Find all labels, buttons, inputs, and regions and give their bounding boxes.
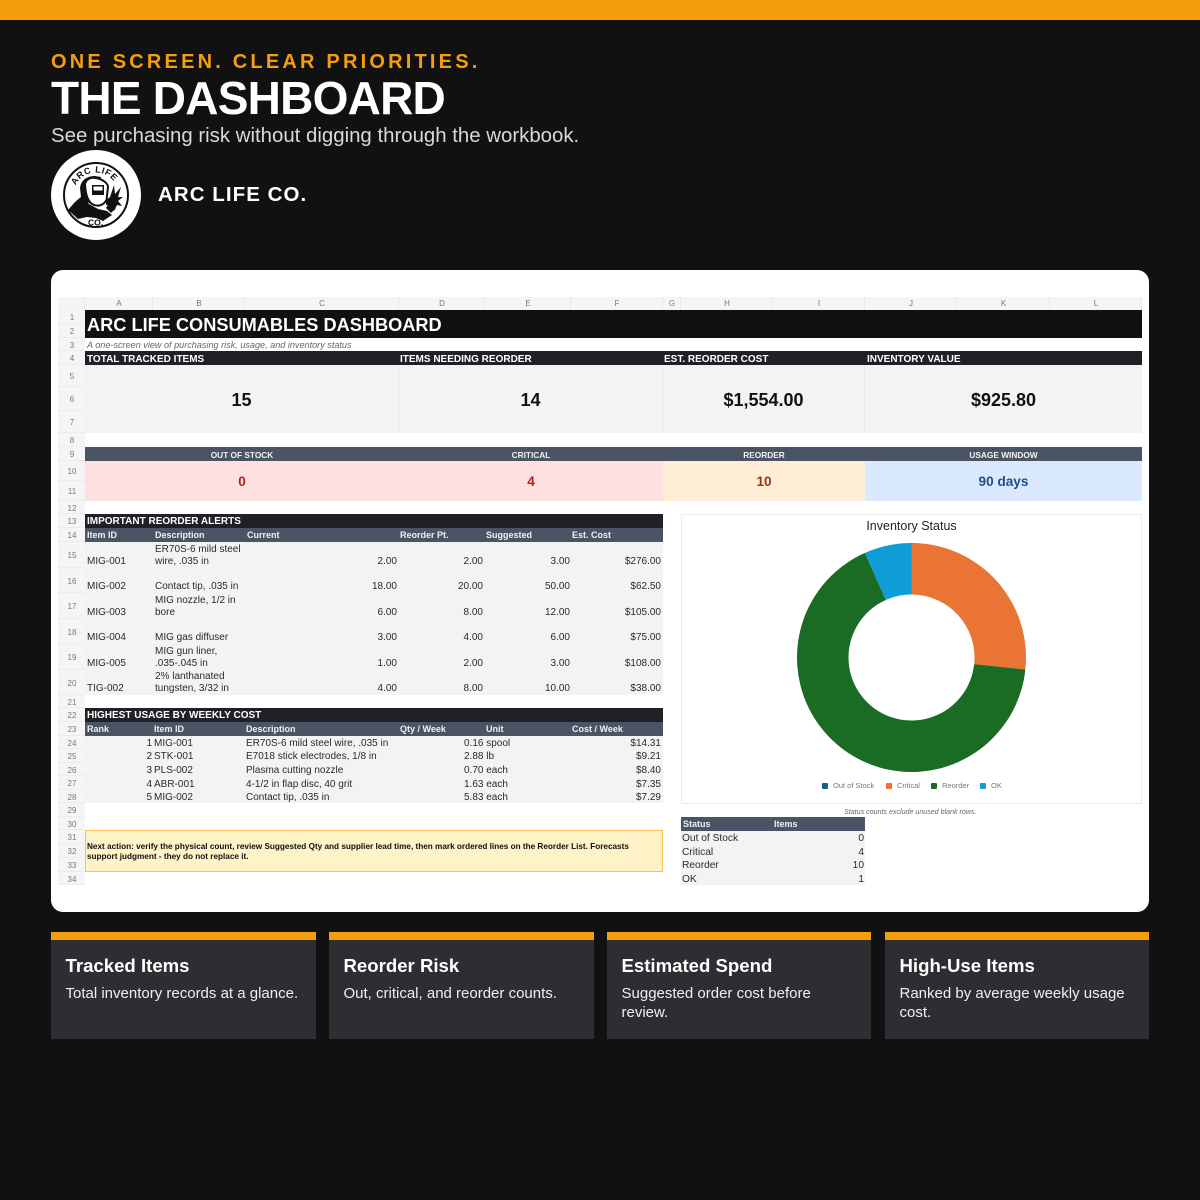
panel: dashboard spreadsheet (51, 270, 1149, 912)
status counts table: 0 (858, 833, 864, 844)
highest usage table: 2.88 lb (464, 751, 494, 762)
highest usage table: ER70S-6 mild steel wire, .035 in (246, 738, 388, 749)
row numbers: 11 (68, 487, 76, 496)
row numbers: 5 (70, 372, 74, 381)
status: usage window: 90 days (979, 474, 1028, 489)
reorder alerts table: 50.00 (545, 581, 570, 592)
reorder alerts table: Contact tip, .035 in (155, 581, 238, 592)
KPI: inventory value: $925.80 (971, 390, 1036, 410)
status label bar: CRITICAL (512, 450, 550, 460)
column headers: H (724, 299, 730, 308)
column headers (58, 297, 1142, 310)
reorder alerts table: wire, .035 in (155, 556, 209, 567)
row numbers: 12 (68, 504, 76, 512)
status label bar: USAGE WINDOW (969, 450, 1038, 460)
subtitle: See purchasing risk without digging through the workbook. (51, 125, 579, 147)
donut chart: inventory status (681, 514, 1142, 804)
row numbers: 33 (68, 861, 76, 870)
highest usage table: $14.31 (630, 738, 661, 749)
reorder alerts table: 4.00 (464, 632, 483, 643)
status counts table: Reorder (682, 860, 719, 871)
highest usage heading (85, 708, 663, 722)
reorder alerts table: TIG-002 (87, 683, 124, 694)
highest usage table: ABR-001 (154, 779, 195, 790)
donut chart: inventory status: OK (991, 781, 1002, 790)
chart footnote: Status counts exclude unused blank rows. (844, 808, 976, 816)
reorder alerts heading: IMPORTANT REORDER ALERTS (87, 516, 241, 527)
reorder alerts table: 6.00 (551, 632, 570, 643)
row numbers: 14 (68, 531, 76, 540)
status: usage window (865, 461, 1142, 501)
row numbers: 3 (70, 340, 74, 350)
status counts table: Out of Stock (682, 833, 738, 844)
column headers: A (116, 299, 122, 308)
donut chart: inventory status: Out of Stock (833, 781, 875, 790)
sheet subtitle: A one-screen view of purchasing risk, usage, and inventory status (87, 340, 352, 350)
highest usage table: MIG-001 (154, 738, 193, 749)
reorder alerts table: 8.00 (464, 683, 483, 694)
reorder alerts table: tungsten, 3/32 in (155, 683, 229, 694)
row numbers: 32 (68, 847, 76, 856)
card: estimated spend (607, 932, 871, 1039)
row numbers: 17 (68, 602, 76, 611)
card: reorder risk: Out, critical, and reorder counts. (344, 985, 557, 1002)
highest usage table: Rank (87, 724, 109, 734)
status counts table (681, 817, 865, 885)
reorder alerts table: ER70S-6 mild steel (155, 544, 241, 555)
reorder alerts table: $62.50 (630, 581, 661, 592)
row numbers: 28 (68, 792, 76, 802)
reorder alerts table: Description (155, 530, 205, 540)
reorder alerts table: $75.00 (630, 632, 661, 643)
highest usage table: 5.83 each (464, 792, 508, 803)
card: high-use items: Ranked by average weekly usage cost. (900, 985, 1125, 1021)
row numbers: 15 (68, 551, 76, 560)
highest usage table: 3 (146, 765, 152, 776)
brand name: ARC LIFE CO. (158, 183, 307, 206)
icon: Arc Life Co. welder logo: CO. (88, 218, 103, 228)
highest usage table: Cost / Week (572, 724, 623, 734)
reorder alerts table: 10.00 (545, 683, 570, 694)
slice: ok (865, 543, 912, 600)
row numbers: 29 (68, 806, 76, 815)
column headers: B (196, 299, 202, 308)
row numbers: 34 (68, 874, 76, 884)
reorder alerts table: 18.00 (372, 581, 397, 592)
row numbers: 8 (70, 436, 74, 445)
card: reorder risk (329, 932, 594, 1039)
status counts table: 1 (858, 874, 864, 885)
row numbers: 21 (68, 698, 76, 706)
reorder alerts table: 2.00 (378, 556, 397, 567)
highest usage table: Item ID (154, 724, 184, 734)
card: high-use items: High-Use Items (900, 955, 1035, 976)
reorder alerts table: Item ID (87, 530, 117, 540)
slice: critical (912, 543, 1026, 669)
status counts table: 4 (858, 847, 864, 858)
row numbers: 25 (68, 752, 76, 761)
KPI label bar: TOTAL TRACKED ITEMS (87, 354, 204, 365)
card: tracked items: Tracked Items (66, 955, 190, 976)
card: reorder risk: Reorder Risk (344, 955, 459, 976)
reorder alerts table: $38.00 (630, 683, 661, 694)
highest usage table: Description (246, 724, 296, 734)
status label bar: OUT OF STOCK (211, 450, 273, 460)
row numbers: 6 (70, 395, 74, 404)
reorder alerts table: MIG-003 (87, 607, 126, 618)
highest usage heading: HIGHEST USAGE BY WEEKLY COST (87, 710, 261, 721)
eyebrow heading: ONE SCREEN. CLEAR PRIORITIES. (51, 51, 481, 73)
status: reorder (663, 461, 865, 501)
row numbers: 20 (68, 678, 76, 688)
sheet title (85, 310, 1142, 338)
row numbers: 18 (68, 628, 76, 636)
title: THE DASHBOARD (51, 72, 445, 124)
column headers: D (439, 299, 445, 308)
reorder alerts table: 1.00 (378, 658, 397, 669)
row numbers: 23 (68, 725, 76, 734)
highest usage table: MIG-002 (154, 792, 193, 803)
highest usage table: 0.16 spool (464, 738, 510, 749)
column headers: E (525, 299, 531, 308)
reorder alerts table: MIG nozzle, 1/2 in (155, 595, 236, 606)
status: out of stock (85, 461, 399, 501)
donut chart: inventory status: Inventory Status (866, 519, 957, 533)
status: critical (399, 461, 663, 501)
reorder alerts table: MIG-002 (87, 581, 126, 592)
highest usage table: 4 (146, 779, 152, 790)
status counts table: Items (774, 819, 798, 829)
reorder alerts table: Est. Cost (572, 530, 611, 540)
KPI label bar: INVENTORY VALUE (867, 354, 961, 365)
next action callout (85, 830, 663, 872)
status counts table: OK (682, 874, 697, 885)
KPI label bar: ITEMS NEEDING REORDER (400, 354, 532, 365)
reorder alerts table: 6.00 (378, 607, 397, 618)
highest usage table: $9.21 (636, 751, 661, 762)
highest usage table: STK-001 (154, 751, 193, 762)
highest usage table (85, 722, 663, 803)
icon: Arc Life Co. welder logo (51, 150, 141, 240)
column headers: F (615, 299, 619, 308)
reorder alerts table: 12.00 (545, 607, 570, 618)
sheet title: ARC LIFE CONSUMABLES DASHBOARD (87, 315, 442, 335)
reorder alerts table: bore (155, 607, 175, 618)
KPI: estimated reorder cost (663, 365, 865, 433)
row numbers: 10 (68, 467, 76, 476)
highest usage table: 1 (146, 738, 152, 749)
reorder alerts table: Current (247, 530, 280, 540)
row numbers: 31 (68, 833, 76, 842)
KPI: items needing reorder: 14 (520, 390, 541, 410)
row numbers: 2 (70, 327, 74, 336)
reorder alerts table: 8.00 (464, 607, 483, 618)
KPI: estimated reorder cost: $1,554.00 (723, 390, 804, 410)
highest usage table: Plasma cutting nozzle (246, 765, 343, 776)
row numbers: 1 (70, 313, 74, 322)
row numbers: 24 (68, 738, 76, 748)
card: tracked items (51, 932, 316, 1039)
row numbers: 13 (68, 517, 76, 526)
highest usage table: E7018 stick electrodes, 1/8 in (246, 751, 377, 762)
highest usage table: Contact tip, .035 in (246, 792, 329, 803)
column headers: I (818, 299, 820, 308)
row numbers: 22 (68, 711, 76, 720)
next action callout: Next action: verify the physical count, review Suggested Qty and supplier lead time, then mark ordered lines on the Reorder List. Forecasts support judgment - they do not replace it. (87, 842, 629, 861)
card: tracked items: Total inventory records at a glance. (66, 985, 298, 1002)
row numbers: 4 (70, 354, 74, 363)
reorder alerts heading (85, 514, 663, 528)
icon: Arc Life Co. welder logo: ARC LIFE (72, 166, 118, 185)
status label bar (85, 447, 1142, 461)
status: reorder: 10 (756, 474, 772, 489)
reorder alerts table: 3.00 (378, 632, 397, 643)
row numbers: 7 (70, 418, 74, 427)
status counts table: Status (683, 819, 711, 829)
column headers: G (669, 299, 675, 308)
column headers: J (909, 299, 913, 308)
KPI label bar: EST. REORDER COST (664, 354, 768, 365)
row numbers: 9 (70, 450, 74, 459)
reorder alerts table: MIG gas diffuser (155, 632, 228, 643)
top accent bar (0, 0, 1200, 20)
row numbers: 19 (68, 653, 76, 662)
row numbers: 27 (68, 779, 76, 788)
reorder alerts table (85, 528, 663, 695)
highest usage table: 2 (146, 751, 152, 762)
card: high-use items (885, 932, 1149, 1039)
reorder alerts table: 2.00 (464, 556, 483, 567)
reorder alerts table: 2.00 (464, 658, 483, 669)
reorder alerts table: Suggested (486, 530, 532, 540)
highest usage table: 1.63 each (464, 779, 508, 790)
KPI label bar (85, 351, 1142, 365)
card: estimated spend: Suggested order cost before review. (622, 985, 811, 1021)
KPI: total tracked items (85, 365, 399, 433)
status counts table: 10 (853, 860, 864, 871)
row numbers (58, 310, 85, 885)
highest usage table: PLS-002 (154, 765, 193, 776)
donut chart: inventory status: Reorder (942, 781, 970, 790)
highest usage table: 4-1/2 in flap disc, 40 grit (246, 779, 352, 790)
reorder alerts table: 3.00 (551, 658, 570, 669)
highest usage table: $8.40 (636, 765, 661, 776)
reorder alerts table: Reorder Pt. (400, 530, 449, 540)
column headers: K (1001, 299, 1006, 308)
reorder alerts table: 3.00 (551, 556, 570, 567)
KPI: total tracked items: 15 (231, 390, 252, 410)
highest usage table: 0.70 each (464, 765, 508, 776)
KPI: inventory value (865, 365, 1142, 433)
highest usage table: $7.35 (636, 779, 661, 790)
row numbers: 16 (68, 576, 76, 586)
highest usage table: Qty / Week (400, 724, 446, 734)
reorder alerts table: MIG-004 (87, 632, 126, 643)
reorder alerts table: MIG-005 (87, 658, 126, 669)
highest usage table: 5 (146, 792, 152, 803)
slice: reorder (797, 553, 1025, 772)
column headers: C (319, 299, 325, 308)
status: out of stock: 0 (238, 474, 246, 489)
reorder alerts table: $108.00 (625, 658, 661, 669)
reorder alerts table: 20.00 (458, 581, 483, 592)
reorder alerts table: $105.00 (625, 607, 661, 618)
column headers: L (1094, 299, 1098, 308)
status counts table: Critical (682, 847, 713, 858)
reorder alerts table: .035-.045 in (155, 658, 208, 669)
donut chart: inventory status: Critical (897, 781, 920, 790)
reorder alerts table: $276.00 (625, 556, 661, 567)
highest usage table: $7.29 (636, 792, 661, 803)
reorder alerts table: MIG-001 (87, 556, 126, 567)
card: estimated spend: Estimated Spend (622, 955, 772, 976)
status label bar: REORDER (743, 450, 785, 460)
row numbers: 26 (68, 766, 76, 774)
reorder alerts table: 2% lanthanated (155, 671, 225, 682)
reorder alerts table: MIG gun liner, (155, 646, 217, 657)
highest usage table: Unit (486, 724, 504, 734)
KPI: items needing reorder (399, 365, 663, 433)
reorder alerts table: 4.00 (378, 683, 397, 694)
row numbers: 30 (68, 820, 76, 828)
status: critical: 4 (527, 474, 535, 489)
